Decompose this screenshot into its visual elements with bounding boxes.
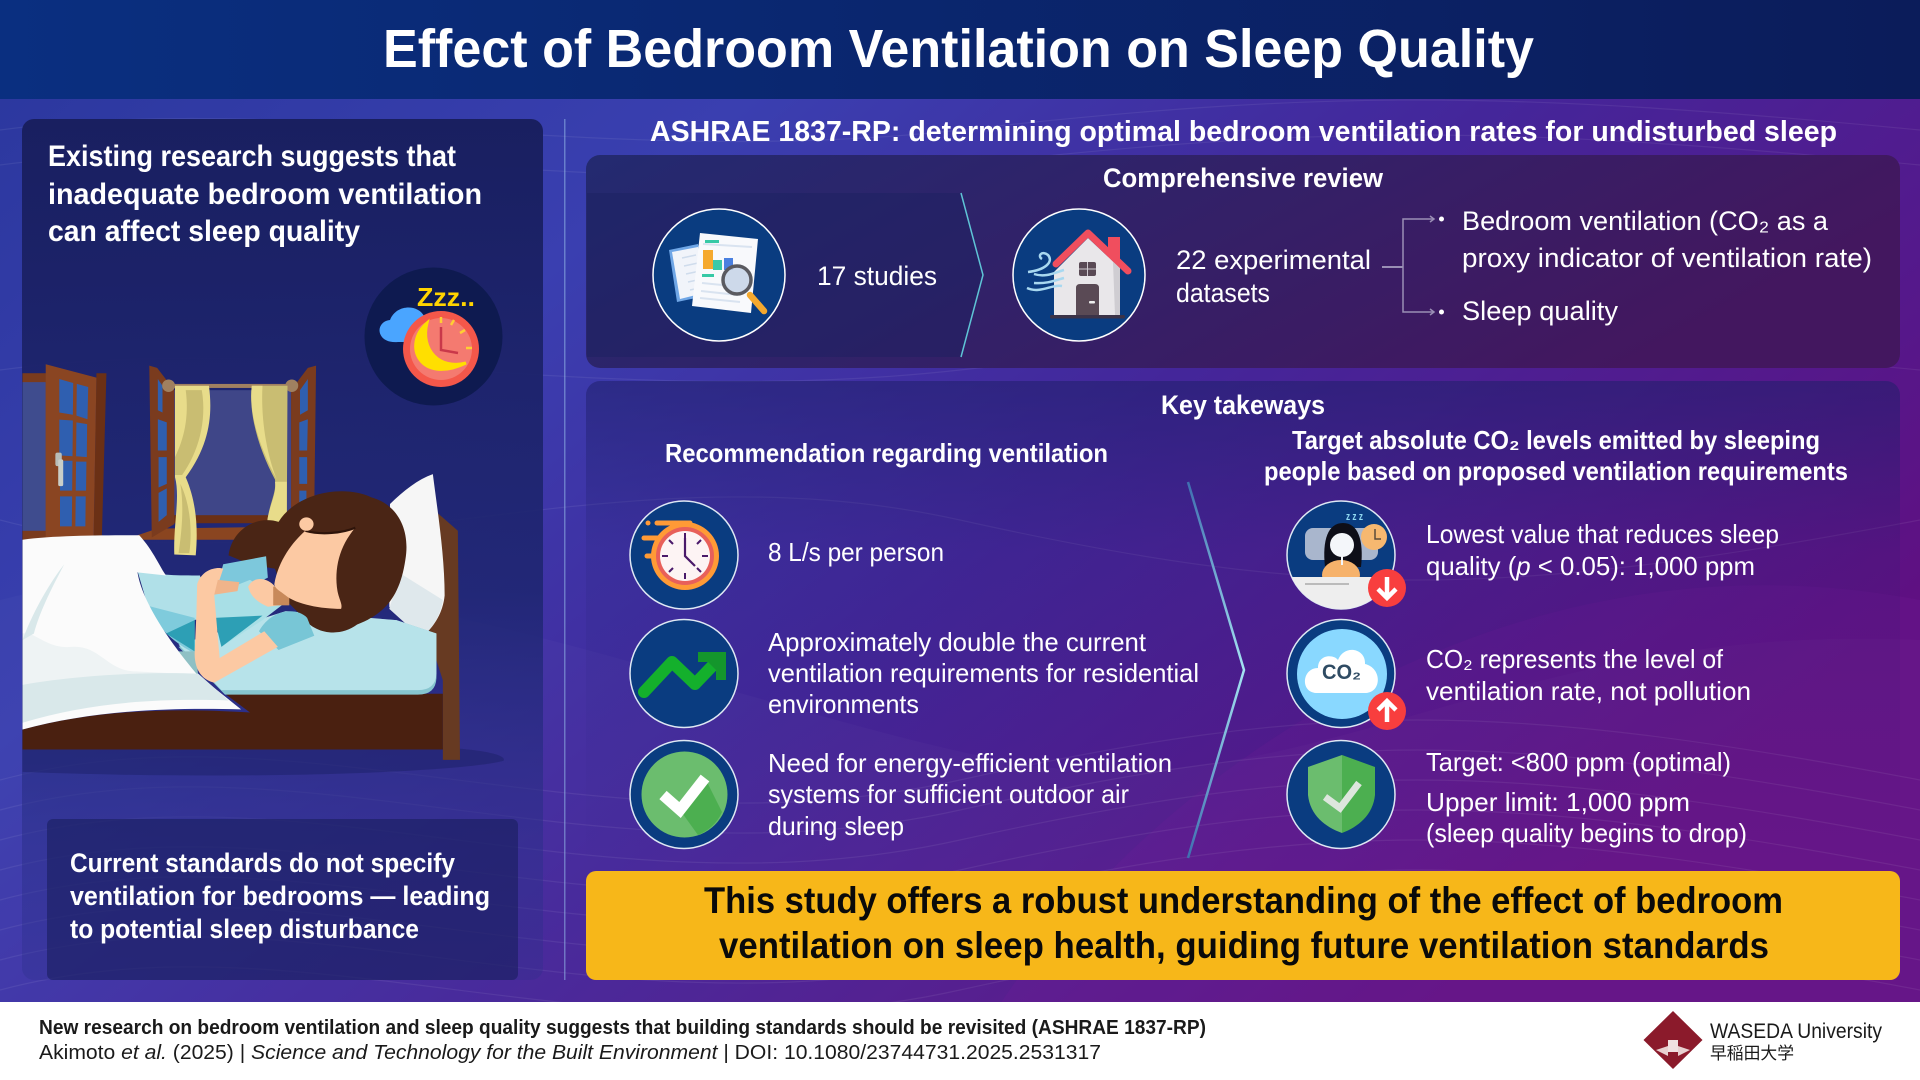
logo: Waseda University: WASEDA University bbox=[1710, 1020, 1882, 1043]
text: targets: Upper limit: 1,000 ppm bbox=[1426, 787, 1690, 817]
callout: current standards bbox=[47, 819, 518, 980]
face bbox=[273, 587, 289, 605]
chevron: studies to datasets bbox=[587, 193, 983, 357]
citation: Akimoto et al. (2025) | Science and Technology for the Built Environment | DOI: 10.1080/23744731.2025.2531317 bbox=[39, 1042, 1101, 1064]
text: targets bbox=[1426, 747, 1747, 848]
conclusion banner bbox=[586, 871, 1900, 980]
callout: current standards: to potential sleep disturbance bbox=[70, 914, 419, 944]
text: energy efficient systems: during sleep bbox=[768, 811, 904, 841]
heading: existing research: inadequate bedroom ventilation bbox=[48, 178, 482, 211]
left window bbox=[22, 373, 47, 540]
text: lowest value: quality (p < 0.05): 1,000 ppm bbox=[1426, 551, 1755, 581]
torso and arm bbox=[137, 571, 211, 620]
text: double the requirements bbox=[768, 627, 1199, 719]
logo: Waseda University: 早稲田大学 bbox=[1710, 1044, 1794, 1063]
list: review variables: Bedroom ventilation (CO₂ as a bbox=[1462, 206, 1829, 236]
heading: existing research: Existing research suggests that bbox=[48, 140, 456, 173]
icon: green check bbox=[630, 740, 738, 848]
list: review variables: Sleep quality bbox=[1462, 296, 1618, 326]
icon: CO2 cloud with up arrow: CO₂ bbox=[1322, 661, 1361, 684]
heading: target CO2 levels: Target absolute CO₂ levels emitted by sleeping bbox=[1292, 425, 1820, 455]
heading: key takeways: Key takeways bbox=[1161, 390, 1325, 420]
logo: Waseda University bbox=[1644, 1011, 1882, 1069]
text: 22 experimental datasets bbox=[1176, 245, 1371, 308]
text: 22 experimental datasets: 22 experimental bbox=[1176, 245, 1371, 275]
connector: branching arrows bbox=[1382, 216, 1444, 315]
header bar bbox=[0, 0, 1920, 99]
text: lowest value bbox=[1426, 519, 1779, 581]
hair bbox=[229, 491, 406, 632]
icon: sleeper with down arrow bbox=[1285, 501, 1406, 612]
icon: fast clock bbox=[630, 501, 738, 609]
conclusion banner: This study offers a robust understanding of the effect of bedroom bbox=[704, 880, 1783, 921]
panel: key takeaways bbox=[586, 381, 1900, 871]
panel: comprehensive review bbox=[586, 155, 1900, 368]
heading: existing research: can affect sleep quality bbox=[48, 215, 360, 248]
icon: sleep clock bbox=[364, 268, 502, 406]
text: targets: Target: <800 ppm (optimal) bbox=[1426, 747, 1731, 777]
citation: New research on bedroom ventilation and sleep quality suggests that building standards should be revisited (ASHRAE 1837-RP) bbox=[39, 1017, 1206, 1039]
heading: target CO2 levels bbox=[1264, 425, 1848, 486]
icon: documents and magnifier bbox=[653, 209, 785, 341]
text: CO2 represents: ventilation rate, not pollution bbox=[1426, 676, 1751, 706]
blanket bbox=[22, 535, 241, 729]
sleep z letters: z z z bbox=[1346, 511, 1363, 523]
icon: shield bbox=[1287, 740, 1395, 848]
title: Effect of Bedroom Ventilation on Sleep Quality bbox=[383, 19, 1534, 79]
text: double the requirements: Approximately double the current bbox=[768, 627, 1147, 657]
icon: rising arrow bbox=[630, 620, 738, 728]
text: lowest value: Lowest value that reduces sleep bbox=[1426, 519, 1779, 549]
text: 8 L/s: 8 L/s per person bbox=[768, 537, 944, 567]
heading: comprehensive review: Comprehensive review bbox=[1103, 163, 1384, 193]
mattress bbox=[179, 613, 436, 695]
text: 22 experimental datasets: datasets bbox=[1176, 278, 1270, 308]
text: energy efficient systems bbox=[768, 748, 1172, 841]
pillow bbox=[389, 474, 445, 638]
text: CO2 represents bbox=[1426, 644, 1751, 706]
text: targets: (sleep quality begins to drop) bbox=[1426, 818, 1747, 848]
icon: CO2 cloud with up arrow bbox=[1287, 620, 1406, 730]
chevron arrow bbox=[1188, 482, 1244, 858]
label: 17 studies: 17 studies bbox=[817, 261, 937, 291]
footer bbox=[0, 1002, 1920, 1080]
centre window bbox=[173, 390, 291, 520]
sleep letters: Zzz.. bbox=[417, 282, 475, 312]
citation bbox=[39, 1017, 1206, 1064]
list: review variables: proxy indicator of ventilation rate) bbox=[1462, 243, 1872, 273]
text: CO2 represents: CO₂ represents the level of bbox=[1426, 644, 1724, 674]
callout: current standards: Current standards do not specify bbox=[70, 848, 455, 878]
text: double the requirements: environments bbox=[768, 689, 919, 719]
heading: existing research bbox=[48, 140, 482, 248]
text: energy efficient systems: systems for sufficient outdoor air bbox=[768, 779, 1129, 809]
heading: recommendation: Recommendation regarding ventilation bbox=[665, 438, 1108, 468]
panel: existing research bbox=[22, 119, 543, 980]
text: double the requirements: ventilation requirements for residential bbox=[768, 658, 1199, 688]
list: review variables bbox=[1462, 206, 1872, 326]
text: energy efficient systems: Need for energy-efficient ventilation bbox=[768, 748, 1172, 778]
callout: current standards: ventilation for bedrooms — leading bbox=[70, 881, 490, 911]
illustration: sleeping woman by open window bbox=[22, 364, 504, 776]
heading: target CO2 levels: people based on proposed ventilation requirements bbox=[1264, 456, 1848, 486]
icon: ventilated house bbox=[1013, 209, 1145, 341]
subtitle: ASHRAE study: ASHRAE 1837-RP: determining optimal bedroom ventilation rates for undisturbed sleep bbox=[650, 116, 1837, 148]
conclusion banner: ventilation on sleep health, guiding future ventilation standards bbox=[719, 925, 1769, 966]
bed base bbox=[429, 513, 460, 760]
